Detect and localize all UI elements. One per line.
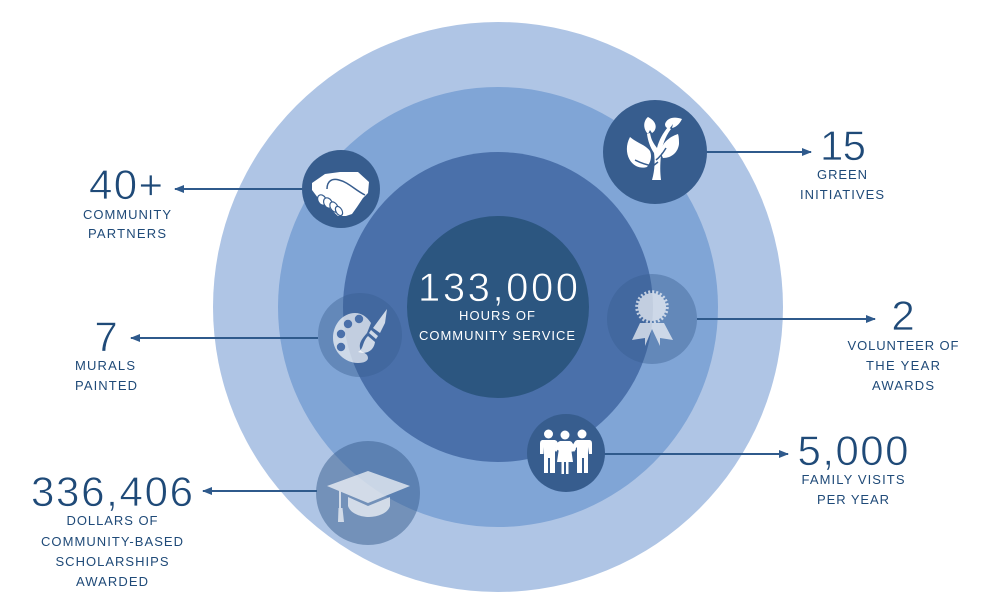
stat: family visits per year: PER YEAR [817,492,889,507]
stat: murals painted: MURALS [75,358,135,373]
center statistic: hours of community service: 133,000 [418,266,578,310]
stat: community partners: 40+ [89,161,163,208]
arrow: green initiatives [700,151,811,153]
stat: green initiatives: 15 [820,122,866,169]
stat: murals painted: PAINTED [75,378,137,393]
arrow: family visits [600,453,788,455]
stat: green initiatives: GREEN [817,167,867,182]
stat: family visits per year: FAMILY VISITS [802,472,905,487]
stat: volunteer of the year awards: VOLUNTEER OF [848,338,959,353]
stat: community partners [83,161,171,241]
stat: volunteer of the year awards: 2 [891,292,915,339]
icon: handshake [302,150,380,228]
center statistic: hours of community service: COMMUNITY SERVICE [419,328,575,343]
icon: paint palette [318,293,402,377]
stat: murals painted [75,313,137,393]
stat: scholarship dollars [31,468,193,589]
arrow: scholarships [203,490,317,492]
icon: family of three [527,414,605,492]
arrow: volunteer awards [697,318,875,320]
arrow: murals [131,337,318,339]
icon: graduation cap [316,441,420,545]
stat: volunteer of the year awards [848,292,959,393]
center statistic: hours of community service [418,266,578,343]
stat: scholarship dollars: COMMUNITY-BASED [41,534,183,549]
stat: family visits per year: 5,000 [798,427,908,474]
stat: scholarship dollars: 336,406 [31,468,193,515]
center statistic: hours of community service: HOURS OF [459,308,535,323]
stat: family visits per year [798,427,908,507]
stat: green initiatives: INITIATIVES [800,187,884,202]
icon: award ribbon [607,274,697,364]
stat: community partners: PARTNERS [88,226,166,241]
stat: scholarship dollars: DOLLARS OF [66,513,158,528]
stat: volunteer of the year awards: THE YEAR [866,358,940,373]
stat: community partners: COMMUNITY [83,207,171,222]
concentric circles [213,22,783,592]
icon: tree [603,100,707,204]
stat: scholarship dollars: SCHOLARSHIPS [56,554,169,569]
stat: green initiatives [800,122,884,202]
stat: scholarship dollars: AWARDED [76,574,148,589]
stat: volunteer of the year awards: AWARDS [872,378,934,393]
stat: murals painted: 7 [94,313,118,360]
arrow: community partners [175,188,310,190]
